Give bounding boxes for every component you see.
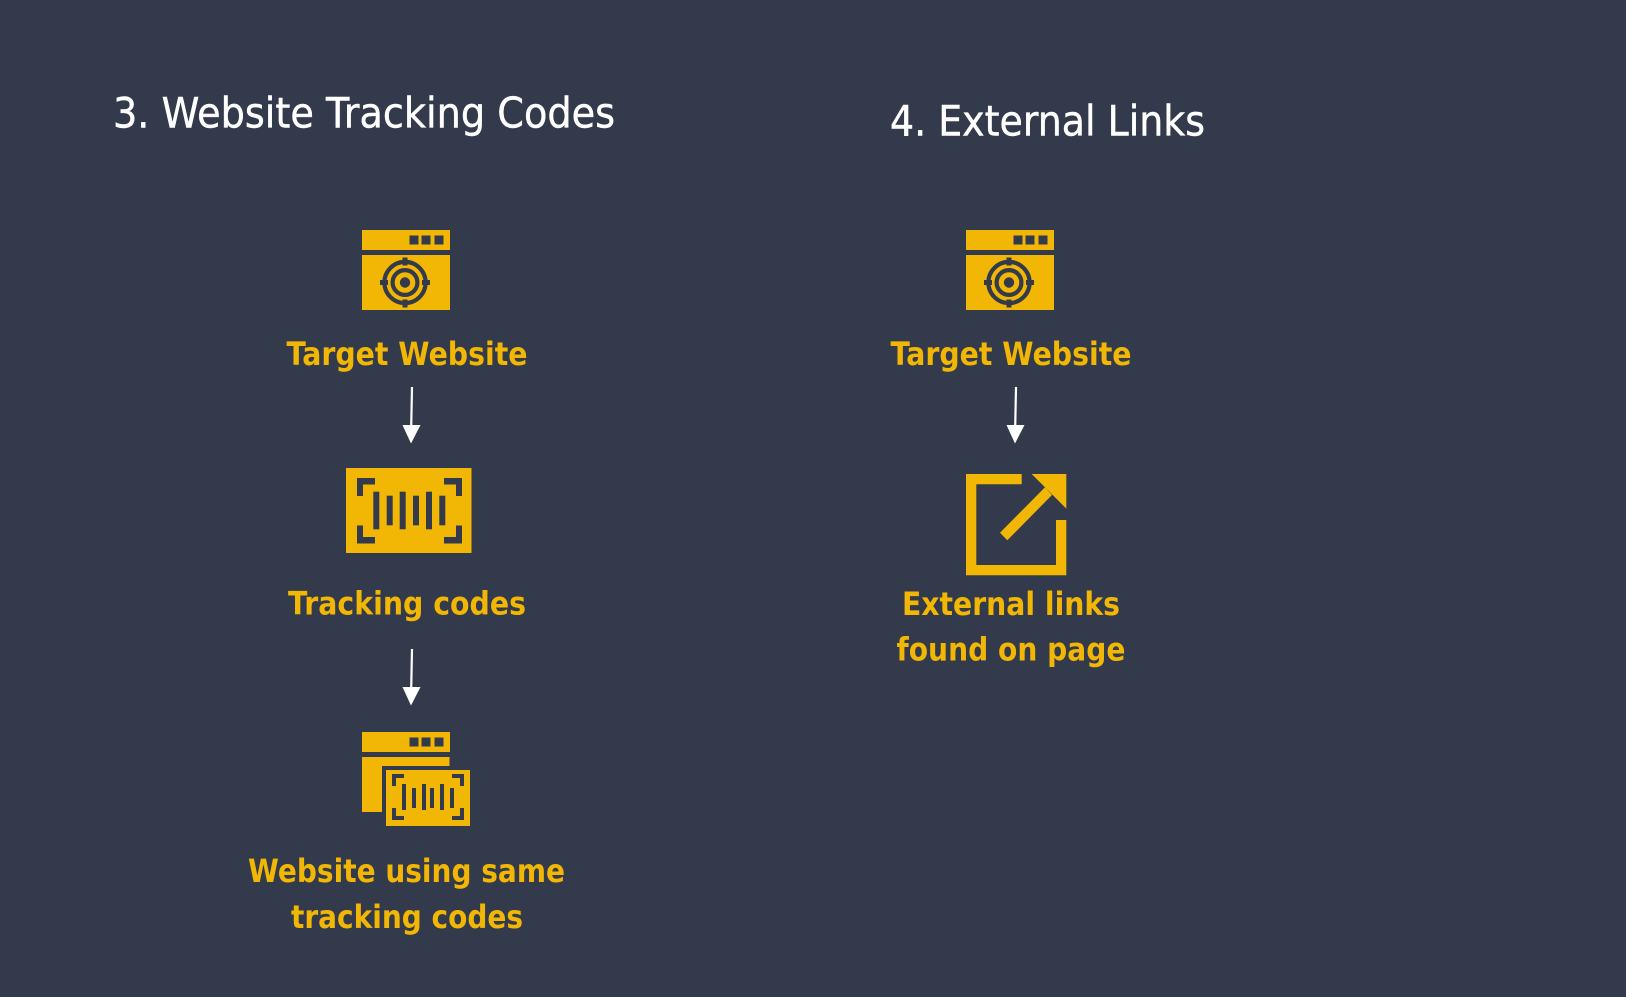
icon: target website xyxy=(362,230,450,310)
icon: website with barcode xyxy=(362,732,470,826)
heading: 4. External Links: 4. External Links xyxy=(890,96,1205,146)
label: Website using same tracking codes xyxy=(248,852,565,936)
icon: target website xyxy=(966,230,1054,310)
label: Website using same tracking codes: Website using same xyxy=(248,852,565,890)
icon: tracking barcode xyxy=(346,468,472,553)
label: Website using same tracking codes: tracking codes xyxy=(291,898,523,936)
label: Tracking codes: Tracking codes xyxy=(288,584,526,622)
arrow: target website to external links xyxy=(1006,387,1024,444)
label: External links found on page: External links xyxy=(902,585,1120,623)
panel: external links xyxy=(890,96,1205,668)
arrow: tracking codes to website using same codes xyxy=(402,649,420,706)
icon: external link xyxy=(966,474,1066,575)
label: Target Website: Target Website xyxy=(890,335,1132,373)
label: External links found on page xyxy=(896,585,1126,668)
panel: website tracking codes xyxy=(113,88,615,936)
arrow: target website to tracking codes xyxy=(402,387,420,444)
label: External links found on page: found on page xyxy=(896,630,1126,668)
heading: 3. Website Tracking Codes: 3. Website Tracking Codes xyxy=(113,88,615,138)
label: Target Website: Target Website xyxy=(286,335,528,373)
